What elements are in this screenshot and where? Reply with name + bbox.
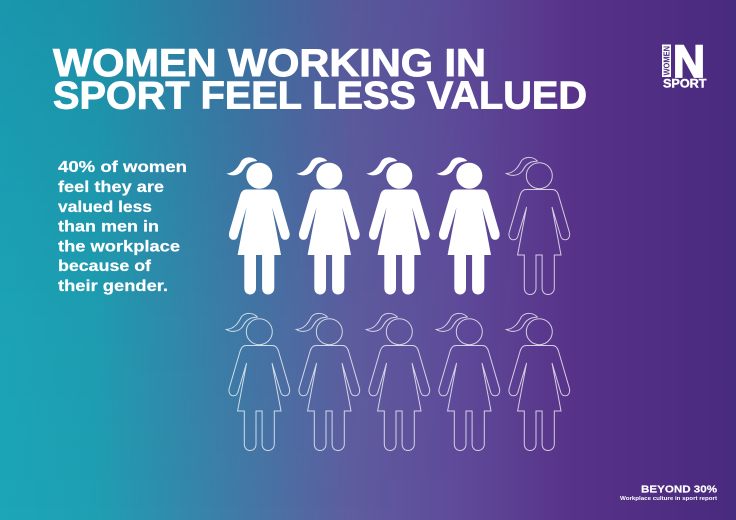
statement text: feel they are: [58, 179, 164, 196]
logo: Women in Sport: [662, 36, 706, 90]
report credit: BEYOND 30%: [641, 484, 718, 496]
report credit: [620, 484, 718, 502]
statement text: than men in: [58, 218, 159, 236]
title: SPORT FEEL LESS VALUED: [53, 74, 587, 118]
statement text: 40% of women: [58, 159, 187, 176]
statement text: their gender.: [58, 278, 168, 295]
background shading: [0, 0, 344, 214]
row 1 filled figures: [226, 157, 500, 294]
statement text: because of: [58, 258, 152, 275]
title: WOMEN WORKING IN: [53, 42, 486, 85]
outlined figures: [226, 157, 570, 450]
statement text: the workplace: [58, 238, 180, 256]
logo: Women in Sport: N: [673, 36, 705, 87]
statement text: [58, 159, 187, 295]
statement text: valued less: [58, 199, 152, 216]
title: [53, 42, 587, 118]
pictogram: 4 of 10 women filled: [226, 157, 570, 450]
logo: Women in Sport: WOMEN: [662, 46, 672, 76]
report credit: Workplace culture in sport report: [620, 496, 717, 502]
logo: Women in Sport: SPORT: [663, 78, 706, 90]
